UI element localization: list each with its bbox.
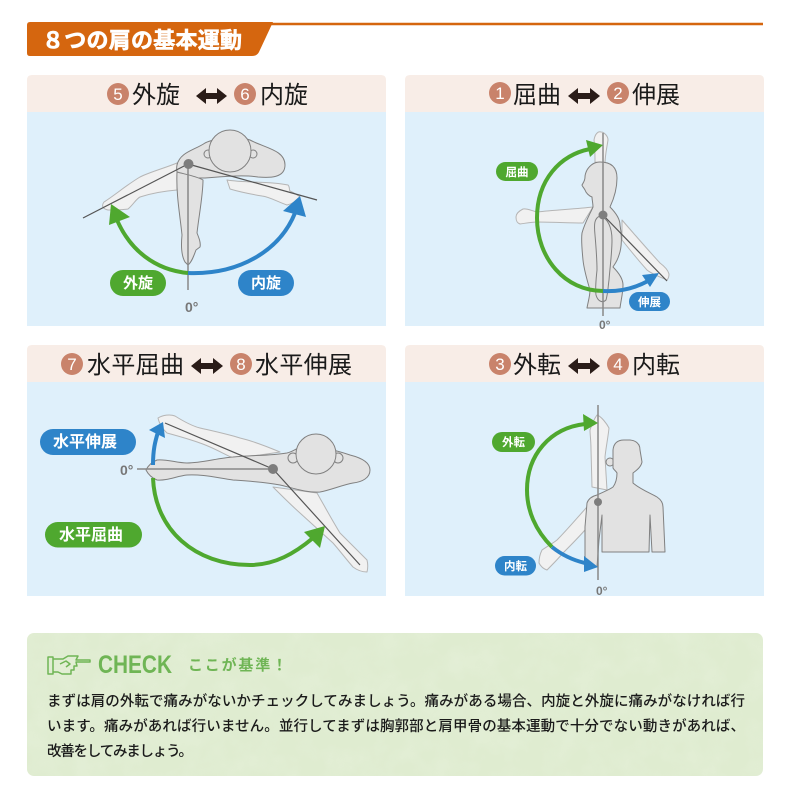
heading: horizontal flexion and extension: 水平伸展 — [255, 352, 352, 379]
zero degree label: 0° — [185, 299, 198, 315]
title banner — [27, 22, 763, 56]
arrow: external rotation — [109, 204, 188, 273]
arrow: internal rotation — [188, 196, 306, 273]
heading: flexion and extension: 2 — [613, 84, 623, 103]
heading: external and internal rotation — [107, 82, 308, 109]
arrow: horizontal extension — [149, 422, 165, 465]
figure: top view with horizontal arm positions — [137, 415, 370, 572]
panel: abduction and adduction — [405, 345, 764, 598]
label: internal rotation — [238, 270, 294, 296]
arrow: abduction — [527, 414, 598, 547]
label: abduction — [492, 432, 535, 452]
heading: horizontal flexion and extension: 水平屈曲 — [87, 352, 184, 379]
title banner: ８つの肩の基本運動 — [42, 28, 242, 53]
heading: flexion and extension — [489, 82, 680, 109]
check heading: CHECK — [98, 651, 172, 679]
figure: side view with arm positions — [516, 132, 669, 316]
check body text: います。痛みがあれば行いません。並行してまずは胸郭部と肩甲骨の基本運動で十分でない動きがあれば、 — [47, 717, 745, 735]
arrow: flexion — [537, 140, 603, 291]
icon: pointing hand — [48, 656, 90, 674]
heading: flexion and extension: 伸展 — [632, 82, 680, 109]
heading: abduction and adduction: 内転 — [632, 352, 680, 379]
arrow: adduction — [552, 547, 598, 572]
arrow: extension — [603, 273, 659, 291]
label: adduction: 内転 — [504, 559, 527, 573]
heading: abduction and adduction: 外転 — [513, 352, 561, 379]
panel: check — [27, 633, 763, 776]
label: internal rotation: 内旋 — [251, 275, 281, 292]
check body text — [47, 692, 745, 760]
zero degree label: 0° — [599, 318, 611, 332]
check subheading: ここが基準！ — [188, 656, 287, 674]
label: horizontal flexion — [45, 522, 142, 548]
label: adduction — [495, 556, 536, 576]
panel: flexion and extension — [405, 75, 764, 332]
check body text: 改善をしてみましょう。 — [47, 743, 193, 760]
label: flexion — [496, 162, 538, 181]
label: horizontal extension — [40, 429, 136, 455]
heading: horizontal flexion and extension: 8 — [236, 355, 246, 374]
label: flexion: 屈曲 — [506, 165, 528, 179]
heading: abduction and adduction — [489, 352, 680, 379]
zero degree label: 0° — [120, 462, 133, 478]
panel: horizontal flexion and extension — [27, 345, 386, 596]
label: external rotation — [110, 270, 166, 296]
heading: external and internal rotation: 外旋 — [132, 82, 180, 109]
figure: front view with arm positions — [539, 405, 665, 580]
heading: abduction and adduction: 4 — [613, 355, 623, 374]
figure: top view with arm positions — [83, 130, 317, 290]
heading: flexion and extension: 1 — [495, 84, 505, 103]
heading: abduction and adduction: 3 — [495, 355, 505, 374]
arrow: horizontal flexion — [153, 478, 325, 565]
heading: horizontal flexion and extension: 7 — [67, 355, 77, 374]
check body text: まずは肩の外転で痛みがないかチェックしてみましょう。痛みがある場合、内旋と外旋に痛みがなければ行 — [47, 692, 745, 710]
heading: flexion and extension: 屈曲 — [513, 82, 561, 109]
heading: external and internal rotation: 6 — [240, 85, 250, 104]
heading: external and internal rotation: 5 — [113, 85, 123, 104]
heading: horizontal flexion and extension — [61, 352, 352, 379]
label: extension — [629, 292, 670, 311]
panel: external and internal rotation — [27, 75, 386, 326]
label: extension: 伸展 — [638, 295, 661, 309]
label: external rotation: 外旋 — [123, 274, 153, 292]
heading: external and internal rotation: 内旋 — [260, 82, 308, 109]
label: horizontal extension: 水平伸展 — [53, 433, 117, 451]
label: horizontal flexion: 水平屈曲 — [59, 526, 123, 544]
label: abduction: 外転 — [502, 435, 525, 449]
zero degree label: 0° — [596, 584, 608, 598]
